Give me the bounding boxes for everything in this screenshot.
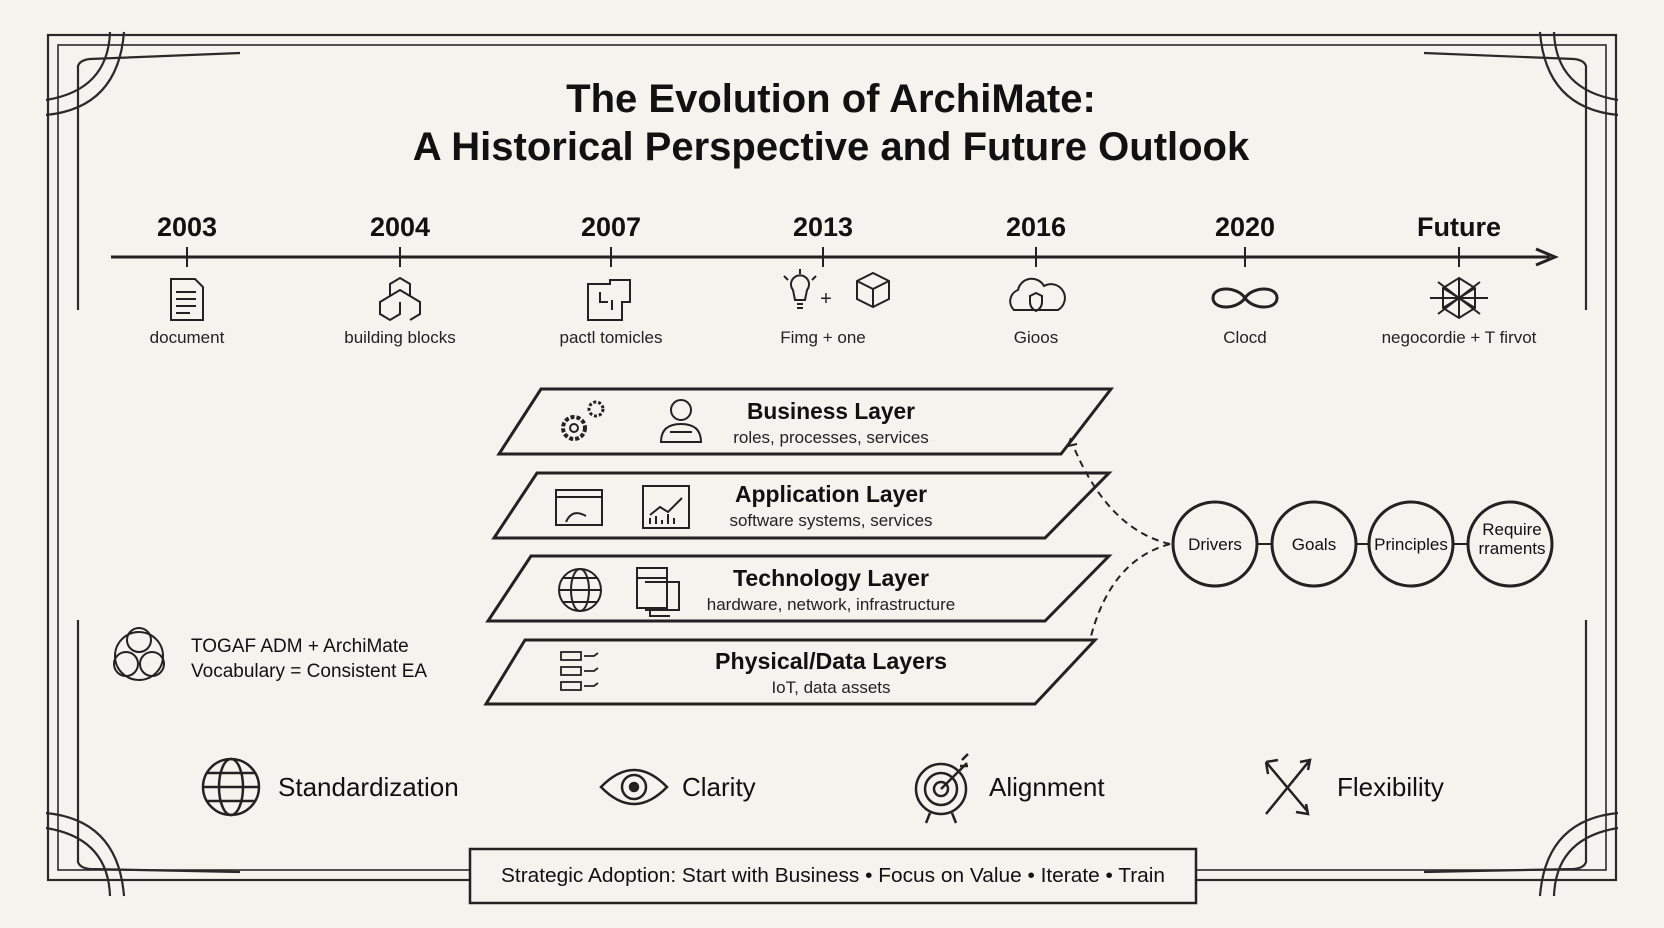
timeline: document: [150, 328, 225, 347]
motivation circles: Goals: [1292, 535, 1336, 554]
title: [413, 77, 1250, 169]
layer: technology: [488, 556, 1109, 621]
benefit: flexibility: [1266, 760, 1444, 814]
TOGAF note: [114, 628, 427, 682]
title: The Evolution of ArchiMate:: [566, 77, 1096, 121]
layer: application: Application Layer: [735, 481, 927, 507]
timeline icons: [171, 269, 1488, 320]
benefit: standardization: [203, 759, 459, 815]
layer: business: Business Layer: [747, 398, 915, 424]
layer: technology: Technology Layer: [733, 565, 929, 591]
layer: business: roles, processes, services: [733, 428, 929, 447]
timeline: 2004: [370, 212, 430, 242]
timeline: pactl tomicles: [560, 328, 662, 347]
motivation circles: rraments: [1478, 539, 1546, 558]
motivation circles: Principles: [1374, 535, 1448, 554]
timeline: building blocks: [344, 328, 456, 347]
benefit: clarity: [601, 770, 756, 804]
timeline: 2013: [793, 212, 853, 242]
layer: technology: hardware, network, infrastructure: [707, 595, 955, 614]
layer: physical/data: [486, 640, 1095, 704]
timeline: 2016: [1006, 212, 1066, 242]
TOGAF note: Vocabulary = Consistent EA: [191, 661, 427, 682]
layer: physical/data: IoT, data assets: [771, 678, 891, 697]
timeline: 2003: [157, 212, 217, 242]
benefit: alignment: Alignment: [989, 772, 1105, 802]
timeline icons: +: [820, 288, 832, 310]
timeline: Fimg + one: [780, 328, 866, 347]
timeline: Future: [1417, 212, 1501, 242]
benefit: standardization: Standardization: [278, 772, 459, 802]
TOGAF note: TOGAF ADM + ArchiMate: [191, 636, 409, 657]
timeline: Gioos: [1014, 328, 1058, 347]
arrows: motivation to layers: [1068, 438, 1170, 640]
motivation circles: [1173, 502, 1552, 586]
benefit: alignment: [916, 754, 1105, 823]
strategic adoption box: Strategic Adoption: Start with Business • Focus on Value • Iterate • Train: [501, 865, 1165, 887]
layer: application: software systems, services: [729, 511, 933, 530]
title: A Historical Perspective and Future Outlook: [413, 125, 1250, 169]
motivation circles: Require: [1482, 520, 1542, 539]
timeline: 2020: [1215, 212, 1275, 242]
timeline: negocordie + T firvot: [1382, 328, 1537, 347]
timeline: [111, 212, 1555, 347]
layer: application: [494, 473, 1109, 538]
layer: business: [499, 389, 1111, 454]
layer: physical/data: Physical/Data Layers: [715, 648, 947, 674]
benefit: flexibility: Flexibility: [1337, 772, 1444, 802]
strategic adoption box: [470, 849, 1196, 903]
timeline: Clocd: [1223, 328, 1267, 347]
timeline: 2007: [581, 212, 641, 242]
motivation circles: Drivers: [1188, 535, 1242, 554]
benefit: clarity: Clarity: [682, 772, 756, 802]
